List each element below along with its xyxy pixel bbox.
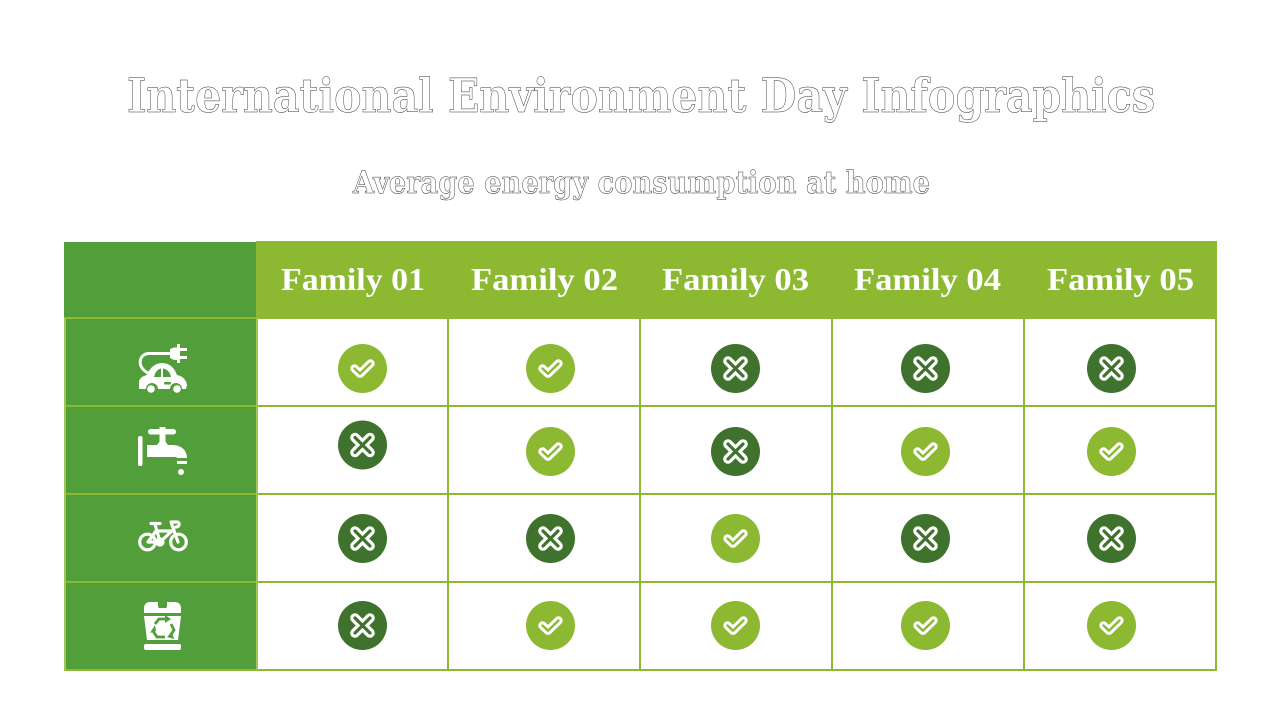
column headings: Family 04 bbox=[854, 261, 1001, 297]
icon: water tap bbox=[138, 427, 187, 475]
title: International Environment Day Infographics bbox=[127, 69, 1155, 124]
column headings: Family 02 bbox=[471, 261, 618, 297]
table header band bbox=[256, 241, 1216, 319]
table row-header column bbox=[64, 242, 256, 670]
subtitle: Average energy consumption at home bbox=[352, 165, 930, 201]
icon: recycle bin bbox=[144, 602, 181, 650]
row 1 status marks bbox=[338, 344, 1136, 393]
column headings: Family 05 bbox=[1047, 261, 1194, 297]
table grid bbox=[64, 241, 1216, 671]
column headings bbox=[281, 261, 1194, 297]
icon: electric car bbox=[139, 344, 187, 393]
comparison table bbox=[64, 241, 1216, 671]
column headings: Family 01 bbox=[281, 261, 425, 297]
row 4 status marks bbox=[338, 601, 1136, 650]
icon: bicycle bbox=[140, 522, 186, 550]
column headings: Family 03 bbox=[662, 261, 809, 297]
row 2 status marks bbox=[338, 420, 1136, 476]
row 3 status marks bbox=[338, 514, 1136, 563]
